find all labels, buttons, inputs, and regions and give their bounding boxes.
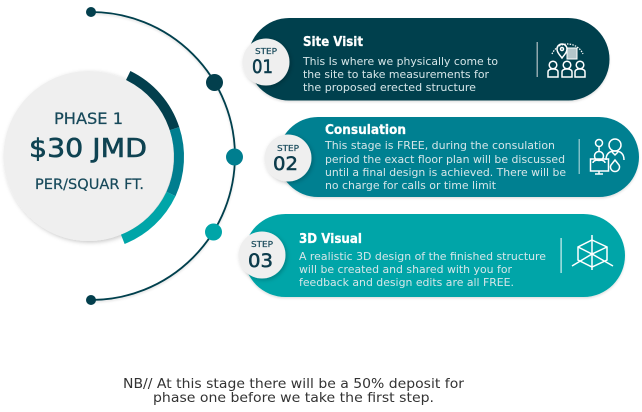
unit label: PER/SQUAR FT. (35, 177, 144, 193)
ring segment: dark (128, 76, 174, 129)
phase label: PHASE 1 (54, 109, 123, 128)
note text: phase one before we take the first step. (153, 390, 434, 406)
step 1 description: the site to take measurements for (303, 68, 489, 81)
step 2 description: period the exact floor plan will be discussed (325, 153, 565, 166)
step 3 badge: 03 (248, 251, 273, 272)
node: step 3 (205, 224, 222, 240)
note text (123, 376, 464, 406)
step 3 badge: STEP (251, 240, 273, 249)
step 2 title: Consulation (325, 123, 406, 138)
step 1 description (302, 55, 498, 94)
step 1 description: This Is where we physically come to (302, 55, 498, 68)
step 2 badge (264, 134, 312, 182)
icon: 3D cube (572, 235, 613, 270)
node: step 2 (226, 148, 243, 166)
panel: step 1 site visit (242, 18, 610, 100)
step 1 description: the proposed erected structure (303, 81, 476, 94)
timeline end dot (86, 295, 96, 305)
step 3 description: feedback and design edits are all FREE. (299, 276, 514, 289)
step 2 divider (578, 139, 580, 174)
step 3 description: A realistic 3D design of the finished structure (299, 250, 546, 263)
timeline arc (86, 7, 243, 305)
step 2 badge: STEP (277, 144, 299, 153)
icon: team at site location (548, 44, 585, 77)
step 1 badge: 01 (252, 57, 273, 78)
step 1 divider (536, 42, 538, 77)
step 2 badge: 02 (273, 154, 298, 175)
step 2 description: no charge for calls or time limit (325, 179, 497, 192)
step 1 title: Site Visit (303, 35, 363, 50)
step 2 description (324, 139, 566, 192)
phase price circle (4, 71, 179, 241)
step 3 divider (560, 238, 562, 273)
timeline start dot (86, 7, 96, 17)
panel: step 2 consultation (264, 117, 639, 197)
step 3 description: will be created and shared with you for (299, 263, 512, 276)
ring segment: light teal (123, 194, 171, 239)
price: $30 JMD (29, 134, 147, 164)
step 3 description (299, 250, 546, 289)
note text: NB// At this stage there will be a 50% deposit for (123, 376, 464, 392)
ring segment: mid teal (171, 129, 179, 194)
icon: consultation people and monitor (590, 139, 624, 174)
step 3 title: 3D Visual (299, 232, 362, 247)
panel: step 3 3D visual (238, 214, 625, 297)
step 2 description: until a final design is achieved. There will be (325, 166, 566, 179)
step 3 badge (238, 232, 286, 278)
step 1 badge: STEP (255, 47, 277, 56)
step 1 badge (242, 38, 290, 86)
step 2 description: This stage is FREE, during the consulation (324, 139, 555, 152)
node: step 1 (206, 74, 223, 91)
